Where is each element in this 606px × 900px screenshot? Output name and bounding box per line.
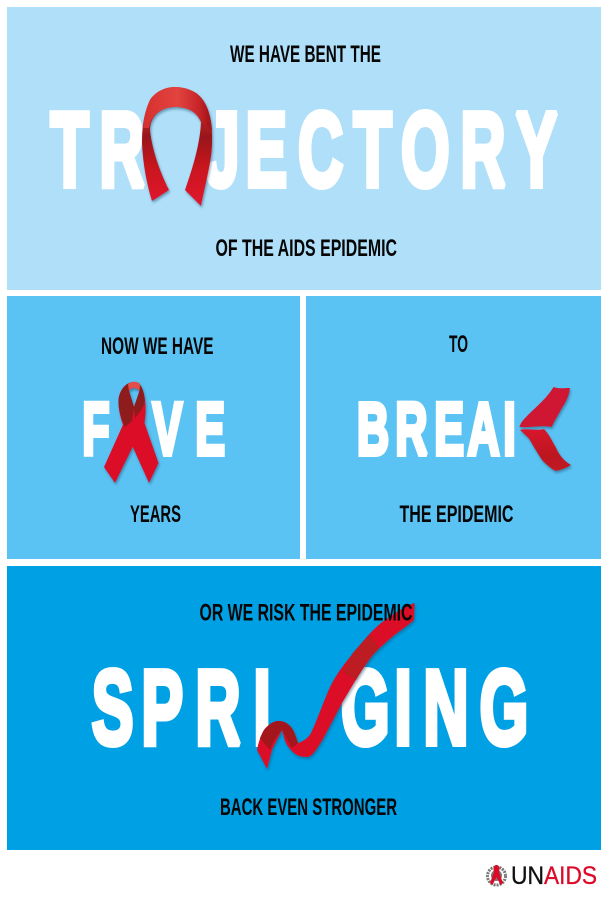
logo: UNAIDS — [488, 862, 597, 890]
icon: rising ribbon — [257, 603, 414, 769]
text: the epidemic: THE EPIDEMIC — [400, 501, 514, 528]
word: five: VE — [153, 388, 225, 470]
panel: trajectory — [7, 7, 601, 290]
panel: break — [306, 296, 601, 559]
word: springing — [92, 649, 528, 767]
text: years: YEARS — [130, 501, 181, 528]
word: springing: GING — [341, 649, 528, 767]
text: now we have: NOW WE HAVE — [101, 333, 214, 360]
text: back even stronger: BACK EVEN STRONGER — [220, 794, 397, 821]
panel: five years — [7, 296, 300, 559]
word: trajectory — [51, 91, 557, 209]
word: five: FI — [82, 388, 122, 470]
word: break: BREAIK — [357, 388, 548, 470]
text: or we risk the epidemic: OR WE RISK THE EPIDEMIC — [200, 600, 413, 626]
icon: red ribbon — [104, 382, 158, 483]
text: UNAIDS wordmark: UN — [511, 862, 544, 890]
word: five — [82, 388, 225, 470]
text: we have bent the: WE HAVE BENT THE — [230, 41, 381, 68]
panel: springing — [7, 566, 601, 850]
icon: UN emblem with ribbon — [488, 865, 506, 885]
text: to: TO — [449, 331, 468, 358]
text: of the aids epidemic: OF THE AIDS EPIDEMIC — [216, 235, 397, 262]
icon: broken ribbon — [519, 387, 571, 471]
logo: UNAIDS: AIDS — [544, 862, 597, 890]
word: trajectory: JECTORY — [205, 91, 557, 209]
icon: ribbon arch — [142, 87, 212, 206]
word: springing: SPRIN — [92, 649, 316, 767]
word: trajectory: TRA — [51, 91, 190, 209]
